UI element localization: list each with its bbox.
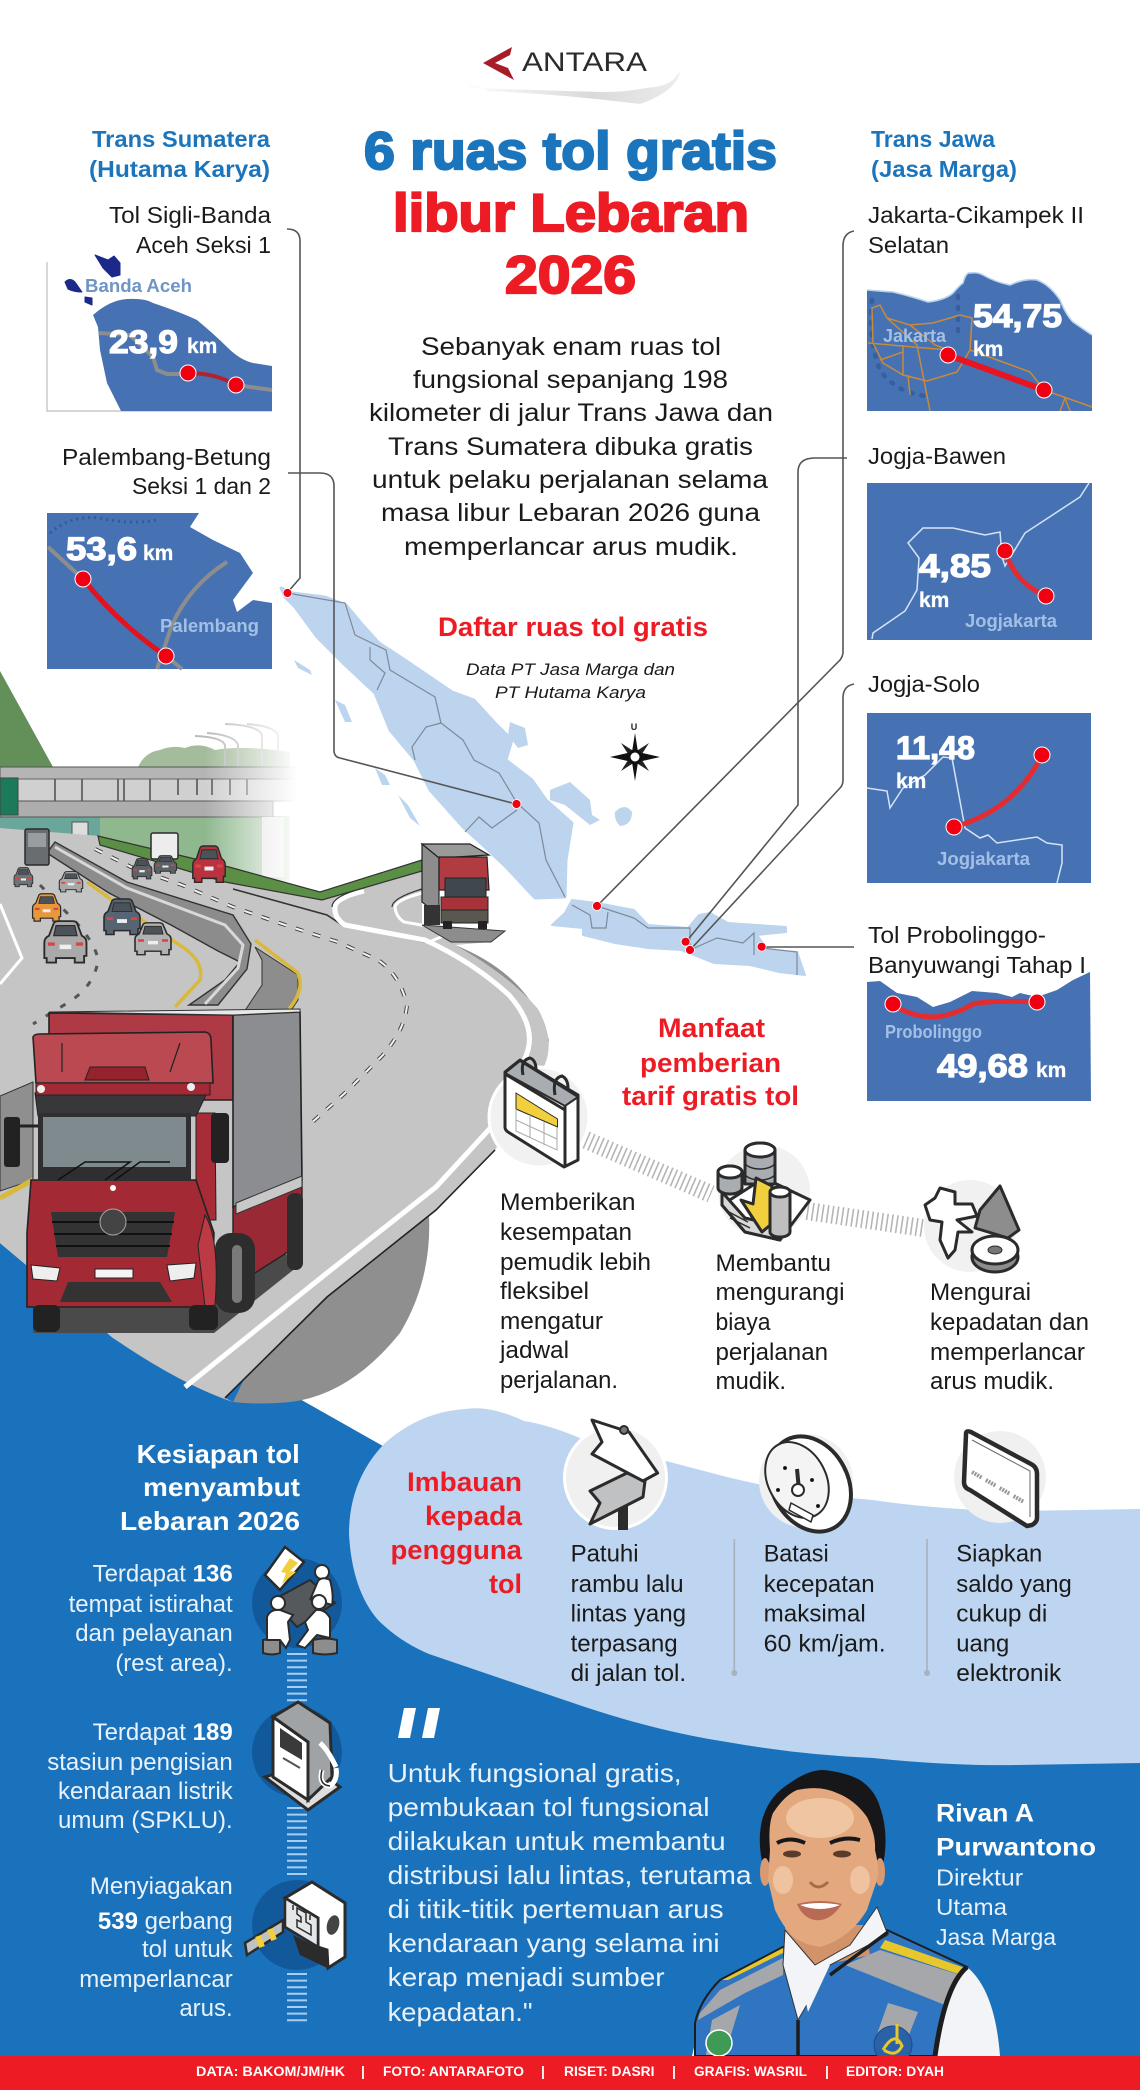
heading: Trans Jawa: (Jasa Marga) [871, 156, 1017, 182]
advice text 2: 60 km/jam. [764, 1630, 886, 1657]
advice text 2: maksimal [764, 1601, 866, 1628]
panel: Jakarta-Cikampek II Selatan [867, 202, 1092, 411]
label [868, 922, 1086, 978]
benefit text 3: kepadatan dan [930, 1309, 1089, 1336]
label: Jakarta-Cikampek II [868, 202, 1084, 228]
advice separators [731, 1539, 930, 1676]
panel: Jogja-Solo: 11,48 [896, 730, 975, 766]
advice text 1: Patuhi [571, 1541, 639, 1568]
quote text: kerap menjadi sumber [388, 1962, 665, 1992]
benefit text 1: mengatur [500, 1308, 603, 1335]
label [109, 202, 271, 258]
advice text 1: di jalan tol. [571, 1660, 686, 1687]
benefit text 2: biaya [716, 1309, 771, 1336]
heading: Kesiapan tol: menyambut [143, 1472, 300, 1502]
intro text block: kilometer di jalur Trans Jawa dan [369, 399, 773, 427]
quote text [388, 1758, 752, 2027]
benefit text 2 [716, 1250, 844, 1395]
panel: Tol Sigli-Banda Aceh: Banda Aceh [85, 276, 192, 296]
big red truck [4, 1009, 303, 1332]
map [867, 713, 1091, 883]
benefit text 1: Memberikan [500, 1189, 636, 1216]
central median [47, 842, 251, 1005]
hatch connectors between benefits [586, 1140, 923, 1228]
icon: electronic money card [954, 1431, 1046, 1526]
heading: Trans Sumatera: (Hutama Karya) [89, 156, 270, 182]
panel: Palembang-Betung [47, 444, 272, 669]
label: Banyuwangi Tahap I [868, 952, 1086, 978]
readiness text 2: Terdapat 189 [93, 1719, 233, 1746]
panel: Jakarta-Cikampek II Selatan: km [973, 338, 1003, 361]
panel: Jogja-Solo: km [896, 770, 926, 793]
panel: Tol Probolinggo-Banyuwangi [867, 922, 1091, 1101]
panel: Tol Probolinggo-Banyuwangi: Probolinggo [885, 1022, 982, 1042]
panel: Jakarta-Cikampek II Selatan: Jakarta [883, 326, 947, 346]
person caption: Purwantono [936, 1834, 1096, 1862]
portrait: Rivan A Purwantono [692, 1770, 1000, 2064]
panel: Jogja-Bawen: km [919, 589, 949, 612]
land [93, 299, 272, 411]
benefit text 3: Mengurai [930, 1279, 1031, 1306]
label: Jogja-Bawen [868, 443, 1006, 469]
logo: ANTARA: ANTARA [522, 47, 647, 77]
big truck shadow [33, 1240, 302, 1333]
nose [810, 1882, 828, 1887]
heading: Kesiapan tol [120, 1439, 300, 1536]
intro text block: Sebanyak enam ruas tol [421, 333, 721, 361]
quote text: Untuk fungsional gratis, [388, 1758, 682, 1788]
advice text 3: cukup di [956, 1601, 1047, 1628]
readiness text 2: kendaraan listrik [58, 1778, 234, 1805]
quote text: distribusi lalu lintas, terutama [388, 1860, 752, 1890]
connector lines [287, 229, 854, 950]
shirt collar [783, 1907, 888, 2020]
intro text block: fungsional sepanjang 198 [413, 366, 728, 394]
readiness text 2 [47, 1719, 234, 1834]
lane centre dashes [33, 849, 407, 1126]
readiness text 1: tempat istirahat [69, 1591, 233, 1618]
heading: Kesiapan tol: Lebaran 2026 [120, 1506, 300, 1536]
traffic vehicles [14, 829, 225, 963]
quote text: kepadatan." [388, 1997, 533, 2027]
heading: Manfaat: pemberian [640, 1048, 781, 1078]
panel: Jogja-Bawen [867, 443, 1092, 640]
advice text 3: elektronik [956, 1660, 1062, 1687]
label: Palembang-Betung [62, 444, 271, 470]
mouth [797, 1901, 842, 1920]
advice text 3: Siapkan [956, 1541, 1042, 1568]
label: Jogja-Solo [868, 671, 980, 697]
benefit text 2: mudik. [716, 1368, 786, 1395]
ears [760, 1858, 770, 1886]
person caption: Utama [936, 1894, 1007, 1920]
icon: math symbols untangling [924, 1180, 1019, 1272]
benefit text 1: fleksibel [500, 1278, 589, 1305]
label: Tol Probolinggo- [868, 922, 1046, 948]
road surface [0, 828, 549, 1402]
advice text 3 [956, 1541, 1072, 1687]
readiness text 1: (rest area). [115, 1650, 233, 1677]
heading: Trans Sumatera: Trans Sumatera [92, 126, 270, 152]
face [768, 1788, 878, 1947]
badges [706, 2030, 732, 2056]
trees and lamps behind the bridge [0, 724, 290, 882]
panel: Tol Probolinggo-Banyuwangi: km [1036, 1059, 1066, 1082]
icon: EV charging station [252, 1702, 342, 1810]
title [364, 122, 777, 305]
map [867, 273, 1092, 411]
source note: PT Hutama Karya [495, 683, 646, 702]
advice text 2: Batasi [764, 1541, 829, 1568]
map [47, 513, 272, 669]
intro text block: masa libur Lebaran 2026 guna [381, 499, 760, 527]
heading: Daftar ruas tol gratis: Daftar ruas tol gratis [438, 612, 708, 642]
footer credits bar: DATA: BAKOM/JM/HK [196, 2063, 345, 2079]
illustration: highway scene with trucks [0, 660, 549, 1404]
advice text 1: lintas yang [571, 1601, 686, 1628]
footer credits bar: | [672, 2063, 676, 2079]
benefit text 2: perjalanan [716, 1339, 828, 1366]
advice text 1 [571, 1541, 686, 1687]
heading: Trans Jawa: Trans Jawa [871, 126, 995, 152]
icon: compass: U [631, 722, 637, 732]
panel: imbauan light blue shape [349, 1408, 1140, 1765]
reflective bands [698, 1950, 960, 2055]
readiness text 3: tol untuk [142, 1936, 234, 1963]
grass strips [98, 836, 422, 900]
advice text 1: terpasang [571, 1630, 678, 1657]
footer credits bar: | [825, 2063, 829, 2079]
advice text 2: kecepatan [764, 1571, 875, 1598]
readiness text 2: umum (SPKLU). [58, 1807, 233, 1834]
benefit text 1: perjalanan. [500, 1367, 618, 1394]
benefit text 3 [930, 1279, 1089, 1395]
vest [695, 1930, 967, 2056]
readiness text 3: arus. [179, 1995, 233, 2022]
quote text: di titik-titik pertemuan arus [388, 1894, 724, 1924]
road shoulder dark [233, 945, 549, 1404]
ladder connectors [287, 1653, 307, 2023]
quote text: dilakukan untuk membantu [388, 1826, 726, 1856]
panel: Jogja-Bawen: 4,85 [919, 548, 991, 584]
readiness text 3: 539 gerbang [98, 1908, 233, 1935]
panel: Tol Sigli-Banda Aceh: km [187, 335, 217, 358]
map [867, 972, 1091, 1101]
quote text: kendaraan yang selama ini [388, 1928, 720, 1958]
footer credits bar: FOTO: ANTARAFOTO [383, 2063, 524, 2079]
heading: Manfaat [622, 1013, 799, 1111]
benefit text 3: memperlancar [930, 1339, 1085, 1366]
sleeves [930, 1967, 1000, 2056]
heading: Kesiapan tol: Kesiapan tol [137, 1439, 300, 1469]
islands [65, 255, 120, 305]
readiness text 1: dan pelayanan [75, 1620, 233, 1647]
heading: Manfaat: Manfaat [658, 1013, 765, 1043]
readiness text 2: stasiun pengisian [47, 1749, 233, 1776]
ramp curve [395, 893, 455, 942]
label: Aceh Seksi 1 [136, 232, 271, 258]
panel: Jogja-Solo [867, 671, 1091, 883]
advice text 2 [764, 1541, 886, 1657]
readiness text 3 [79, 1873, 234, 2022]
heading: Imbauan kepada pengguna tol: Imbauan [407, 1467, 522, 1497]
readiness text 3: Menyiagakan [90, 1873, 233, 1900]
source note [466, 660, 675, 702]
benefit text 1: pemudik lebih [500, 1249, 651, 1276]
label [868, 202, 1084, 258]
icon: direction sign [564, 1420, 666, 1530]
benefit text 2: mengurangi [716, 1279, 844, 1306]
person caption: Jasa Marga [936, 1924, 1056, 1950]
advice text 1: rambu lalu [571, 1571, 684, 1598]
intro text block: untuk pelaku perjalanan selama [372, 466, 768, 494]
panel: Tol Probolinggo-Banyuwangi: 49,68 [937, 1048, 1028, 1084]
panel: Palembang-Betung: km [143, 542, 173, 565]
icon: calendar [489, 1058, 589, 1167]
hill: green slope [0, 671, 53, 767]
heading: Imbauan kepada pengguna tol: kepada [425, 1501, 523, 1531]
footer credits bar: | [361, 2063, 365, 2079]
advice text 3: uang [956, 1630, 1009, 1657]
neck [785, 1925, 870, 1968]
icon: toll gate [245, 1880, 345, 1970]
footer credits bar: EDITOR: DYAH [846, 2063, 944, 2079]
footer credits bar: | [541, 2063, 545, 2079]
person caption: Direktur [936, 1864, 1023, 1890]
panel: Tol Sigli-Banda Aceh [47, 202, 272, 411]
readiness text 1: Terdapat 136 [93, 1560, 233, 1588]
heading: Trans Sumatera [89, 126, 270, 182]
background: blue lower section [0, 1243, 1140, 2090]
benefit text 3: arus mudik. [930, 1368, 1054, 1395]
benefit text 2: Membantu [716, 1250, 831, 1277]
overpass bridge [0, 767, 295, 877]
icon: quotation mark [398, 1708, 440, 1738]
icon: rest area [252, 1547, 342, 1654]
base under small truck [422, 925, 505, 942]
title: 2026 [505, 246, 636, 305]
logo: ANTARA [460, 33, 680, 104]
footer credits bar [0, 2056, 1140, 2090]
label: Selatan [868, 232, 949, 258]
brows and eyes [777, 1839, 860, 1843]
label: Seksi 1 dan 2 [132, 473, 271, 499]
label: Tol Sigli-Banda [109, 202, 271, 228]
benefit text 1: jadwal [499, 1337, 569, 1364]
heading: Imbauan kepada pengguna tol [390, 1467, 523, 1599]
map frame [47, 262, 272, 411]
map route dots [283, 588, 766, 954]
title: libur Lebaran [393, 184, 749, 243]
icon: compass [610, 722, 660, 781]
benefit text 1 [499, 1189, 651, 1394]
label [62, 444, 271, 499]
yellow lines [87, 882, 300, 1009]
dark lane [244, 947, 298, 1012]
readiness text 1 [69, 1560, 233, 1677]
left barrier [0, 1082, 33, 1191]
hair [760, 1770, 886, 1870]
road edge white lines [185, 891, 529, 1387]
icon: coins and banknotes [718, 1143, 810, 1240]
panel: Palembang-Betung: 53,6 [66, 531, 137, 567]
panel: Tol Sigli-Banda Aceh: 23,9 [109, 324, 178, 360]
person caption: Rivan A [936, 1800, 1034, 1828]
title: 6 ruas tol gratis [364, 122, 777, 181]
panel: Jogja-Solo: Jogjakarta [937, 849, 1031, 869]
readiness text 3: memperlancar [79, 1966, 233, 1993]
heading: Manfaat: tarif gratis tol [622, 1081, 799, 1111]
benefit text 1: kesempatan [500, 1219, 632, 1246]
map: Sumatra and Java [281, 588, 805, 975]
icon: speedometer [753, 1422, 867, 1546]
intro text block [369, 333, 773, 561]
source note: Data PT Jasa Marga dan [466, 660, 675, 679]
quote text: pembukaan tol fungsional [388, 1792, 710, 1822]
intro text block: memperlancar arus mudik. [404, 533, 738, 561]
person caption [936, 1800, 1096, 1950]
small red truck [422, 844, 489, 929]
panel: Jakarta-Cikampek II Selatan: 54,75 [973, 298, 1062, 334]
heading: Imbauan kepada pengguna tol: tol [489, 1569, 522, 1599]
intro text block: Trans Sumatera dibuka gratis [388, 433, 753, 461]
fade to white [205, 660, 297, 890]
map [867, 483, 1092, 640]
heading: Imbauan kepada pengguna tol: pengguna [390, 1535, 523, 1565]
panel: Jogja-Bawen: Jogjakarta [965, 611, 1058, 631]
footer credits bar: GRAFIS: WASRIL [694, 2063, 807, 2079]
road [99, 333, 272, 390]
advice text 3: saldo yang [956, 1571, 1072, 1598]
footer credits bar: RISET: DASRI [564, 2063, 654, 2079]
heading: Trans Jawa [871, 126, 1017, 182]
panel: Palembang-Betung: Palembang [160, 616, 259, 636]
